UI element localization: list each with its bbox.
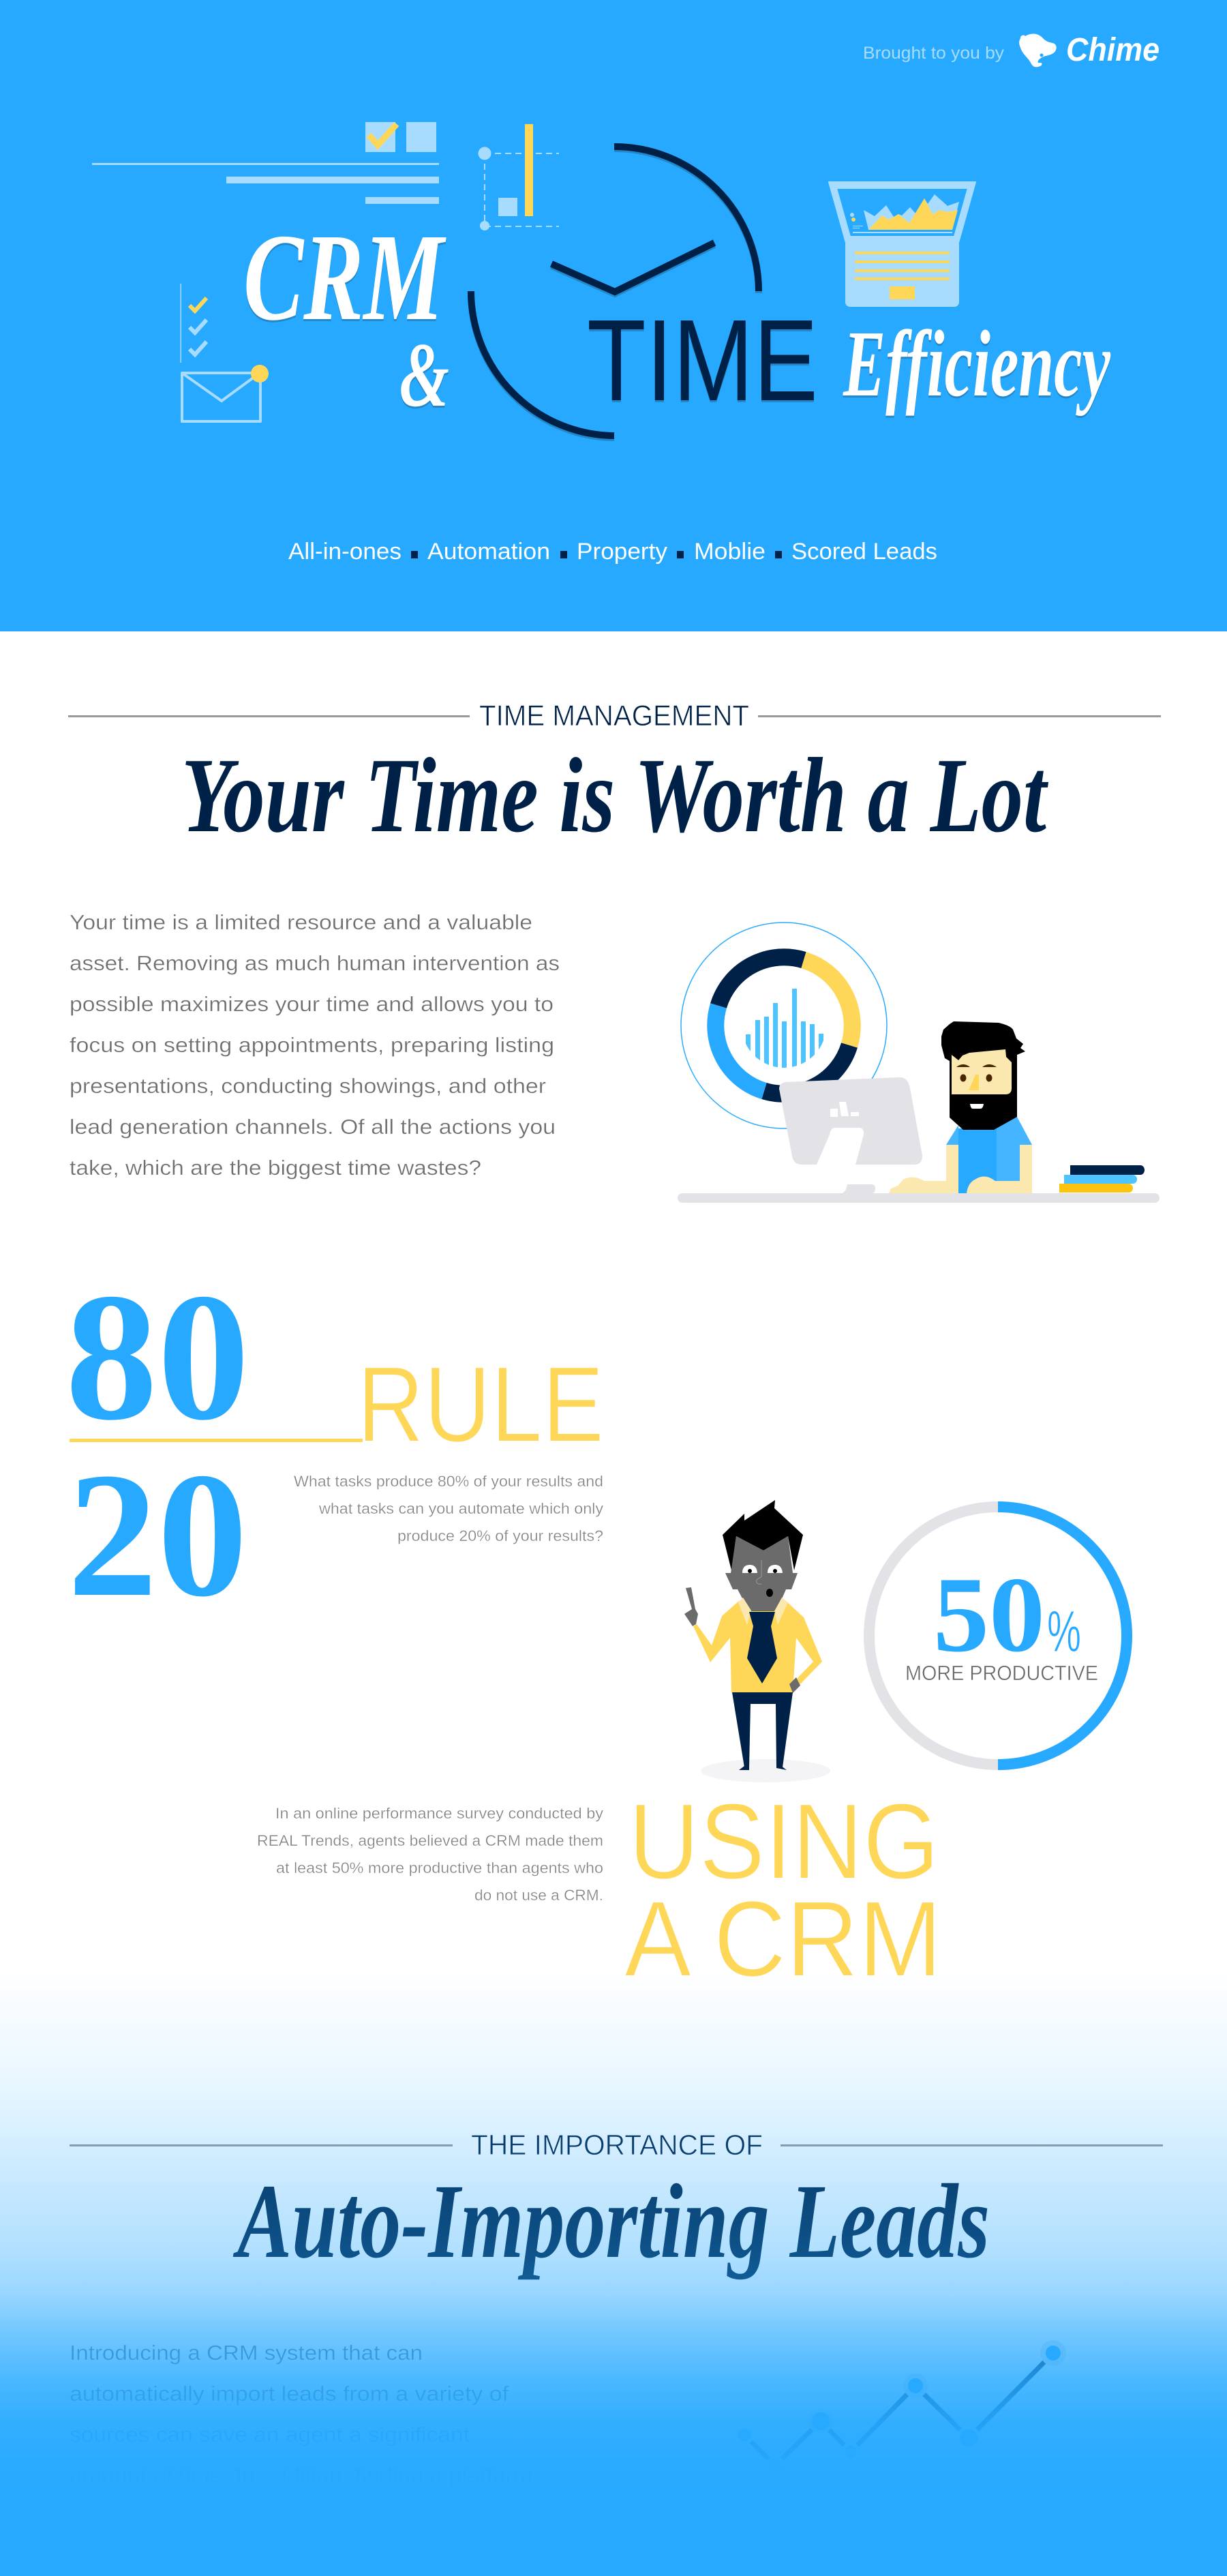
- section label: [70, 2129, 1163, 2161]
- heading: RULE: RULE: [357, 1345, 604, 1465]
- section label: THE IMPORTANCE OF: [471, 2129, 763, 2161]
- text block: auto import: sources can save an agent a significant: [70, 2423, 470, 2446]
- illustration: man at computer: [678, 923, 1160, 1203]
- feature list: Property: [577, 539, 667, 565]
- panel: header: [0, 0, 1227, 631]
- illustration: man with raised finger: [684, 1500, 830, 1782]
- heading: ampersand: &: [399, 325, 449, 426]
- text block: intro: take, which are the biggest time wastes?: [70, 1156, 481, 1180]
- sponsor credit: Chime: [1066, 32, 1160, 68]
- heading: TIME: TIME: [587, 296, 818, 425]
- icon: clock with hands: [471, 147, 759, 436]
- panel: time management: [68, 700, 1161, 1203]
- text block: auto import: [70, 2341, 532, 2528]
- text block: auto import: Introducing a CRM system that can: [70, 2341, 423, 2365]
- section label: [68, 700, 1161, 732]
- heading: USING A CRM: [624, 1782, 942, 1999]
- text block: intro: lead generation channels. Of all the actions you: [70, 1115, 556, 1139]
- section label: TIME MANAGEMENT: [479, 700, 749, 732]
- man: [889, 1021, 1032, 1193]
- sponsor credit: Brought to you by: [863, 44, 1005, 63]
- icon: envelope: [182, 365, 269, 421]
- text block: intro: possible maximizes your time and allows you to: [70, 992, 554, 1016]
- chart: 50 percent ring: MORE PRODUCTIVE: [905, 1661, 1098, 1685]
- text block: survey: do not use a CRM.: [474, 1887, 603, 1904]
- stat: 20: 20: [67, 1436, 247, 1634]
- text block: intro: presentations, conducting showings, and other: [70, 1074, 546, 1098]
- text block: rule question: what tasks can you automate which only: [318, 1500, 603, 1517]
- feature list: Automation: [427, 539, 550, 565]
- text block: intro: focus on setting appointments, preparing listing: [70, 1033, 554, 1057]
- text block: rule question: [294, 1473, 603, 1544]
- chart: 50 percent ring: [869, 1507, 1127, 1765]
- sponsor credit: [863, 32, 1160, 68]
- chart: 50 percent ring: %: [1047, 1600, 1081, 1664]
- text block: survey: [257, 1805, 603, 1904]
- text block: rule question: What tasks produce 80% of your results and: [294, 1473, 603, 1490]
- heading: USING A CRM: A CRM: [624, 1879, 942, 1999]
- text block: auto import: like Chime that doesn't charge per importing: [70, 2504, 523, 2528]
- heading: CRM: CRM: [243, 208, 446, 346]
- text block: rule question: produce 20% of your results?: [397, 1527, 603, 1544]
- icon: laptop with chart: [829, 182, 975, 307]
- text block: survey: In an online performance survey conducted by: [275, 1805, 603, 1822]
- icon: document lines with checkbox: [92, 122, 439, 204]
- panel: 80/20 rule: [65, 1255, 604, 1634]
- text block: survey: at least 50% more productive than agents who: [276, 1859, 603, 1876]
- text block: intro: Your time is a limited resource and a valuable: [70, 910, 532, 934]
- feature list: All-in-ones: [288, 539, 402, 565]
- stat: 80: 80: [65, 1255, 249, 1458]
- heading: USING A CRM: USING: [628, 1782, 939, 1902]
- chart: line graph: [735, 2340, 1066, 2475]
- text block: auto import: automatically import leads from a variety of: [70, 2382, 509, 2406]
- monitor: [779, 1077, 922, 1193]
- desk: [678, 1193, 1160, 1203]
- text block: intro: asset. Removing as much human intervention as: [70, 951, 560, 975]
- text block: intro: [70, 910, 560, 1180]
- icon: checklist: [180, 284, 207, 363]
- icon: dashed bar chart: [479, 124, 559, 230]
- panel: using a CRM: [257, 1500, 1127, 1999]
- text block: auto import: amount of time. In addition, finding a platform: [70, 2463, 532, 2487]
- divider line of the rule: [70, 1439, 363, 1442]
- feature list: [288, 539, 937, 565]
- chart: 50 percent ring: 50: [933, 1555, 1045, 1675]
- text block: survey: REAL Trends, agents believed a CRM made them: [257, 1832, 603, 1849]
- chart: donut: [681, 923, 887, 1128]
- panel: auto-importing leads: [70, 2129, 1163, 2528]
- feature list: Moblie: [694, 539, 766, 565]
- books: [1059, 1165, 1145, 1193]
- feature list: Scored Leads: [791, 539, 937, 565]
- heading: Auto-Importing Leads: [232, 2162, 990, 2280]
- icon: chime bell logo: [1019, 33, 1057, 67]
